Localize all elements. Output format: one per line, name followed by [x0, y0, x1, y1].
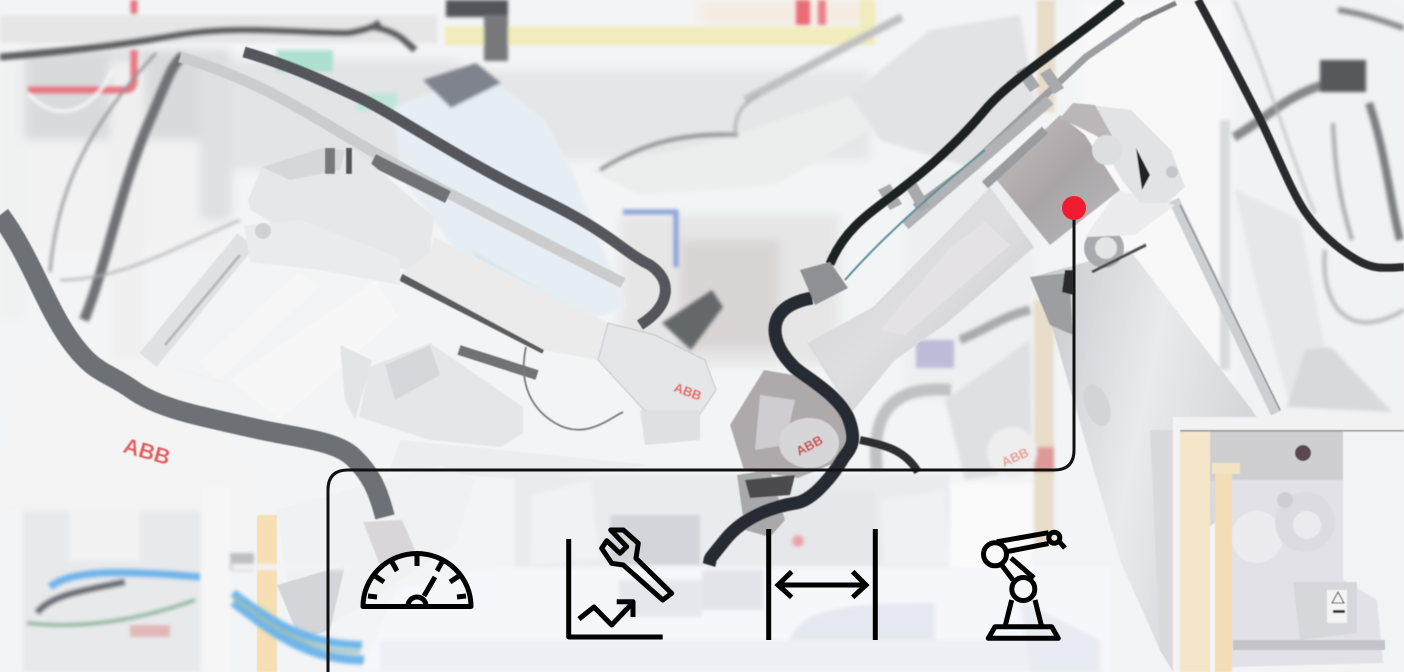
- ABB logo on main wrist: ABB: [793, 432, 825, 459]
- icon: chart with wrench: [569, 530, 672, 637]
- ABB logo on rear wrist: ABB: [999, 445, 1031, 470]
- lower motor: [359, 343, 523, 447]
- cable connector: [800, 262, 848, 305]
- motor housing: [248, 148, 434, 270]
- front frame and robot base, lower right: [1150, 417, 1404, 672]
- ABB logo on left forearm: ABB: [672, 380, 704, 403]
- teal thin cable: [845, 150, 985, 280]
- S cable: [709, 298, 853, 565]
- forearm: [401, 237, 608, 360]
- rod clamps: [878, 66, 1064, 212]
- grey side plate: [995, 115, 1120, 245]
- icon: industrial robot arm: [984, 532, 1065, 638]
- dark shadow bars: [373, 160, 448, 197]
- ABB logo on left robot: ABB: [121, 433, 173, 470]
- elbow link: [244, 220, 400, 285]
- wrist: [730, 370, 850, 478]
- red marker dot: [1062, 196, 1086, 220]
- workpiece behind left robot: [394, 73, 626, 330]
- car body in the lower centre: [362, 475, 1110, 672]
- icon: width between two lines: [769, 529, 875, 640]
- link bar with rods: [180, 57, 623, 283]
- dark cable: [244, 52, 665, 325]
- background robot, right side: [1235, 190, 1325, 405]
- main dark cable: [830, 0, 1122, 264]
- main robot: cylinder and upper arm: [709, 0, 1404, 672]
- background robot arm, upper centre: [590, 85, 905, 195]
- connector line: [328, 208, 1074, 672]
- upper link rods: [915, 20, 1140, 207]
- lower left robot body and heavy cable: [0, 215, 475, 672]
- warning label: [1332, 592, 1344, 603]
- background robot behind main arm: [876, 389, 951, 470]
- strut: [1174, 200, 1276, 413]
- left machine cabinet: [0, 487, 364, 672]
- hydraulic cylinder: [1032, 250, 1290, 672]
- right dark cable: [1198, 0, 1404, 268]
- icon: speedometer: [363, 554, 471, 606]
- forearm: [807, 187, 1034, 413]
- clamp under wrist: [737, 470, 785, 537]
- strut: [148, 240, 246, 360]
- forearm end cap: [598, 323, 716, 417]
- cylinders: [198, 273, 319, 380]
- left robot with forearm: [148, 52, 716, 480]
- head housing: [1060, 103, 1185, 203]
- pivot joint: [1084, 228, 1124, 268]
- link below head: [1085, 190, 1175, 237]
